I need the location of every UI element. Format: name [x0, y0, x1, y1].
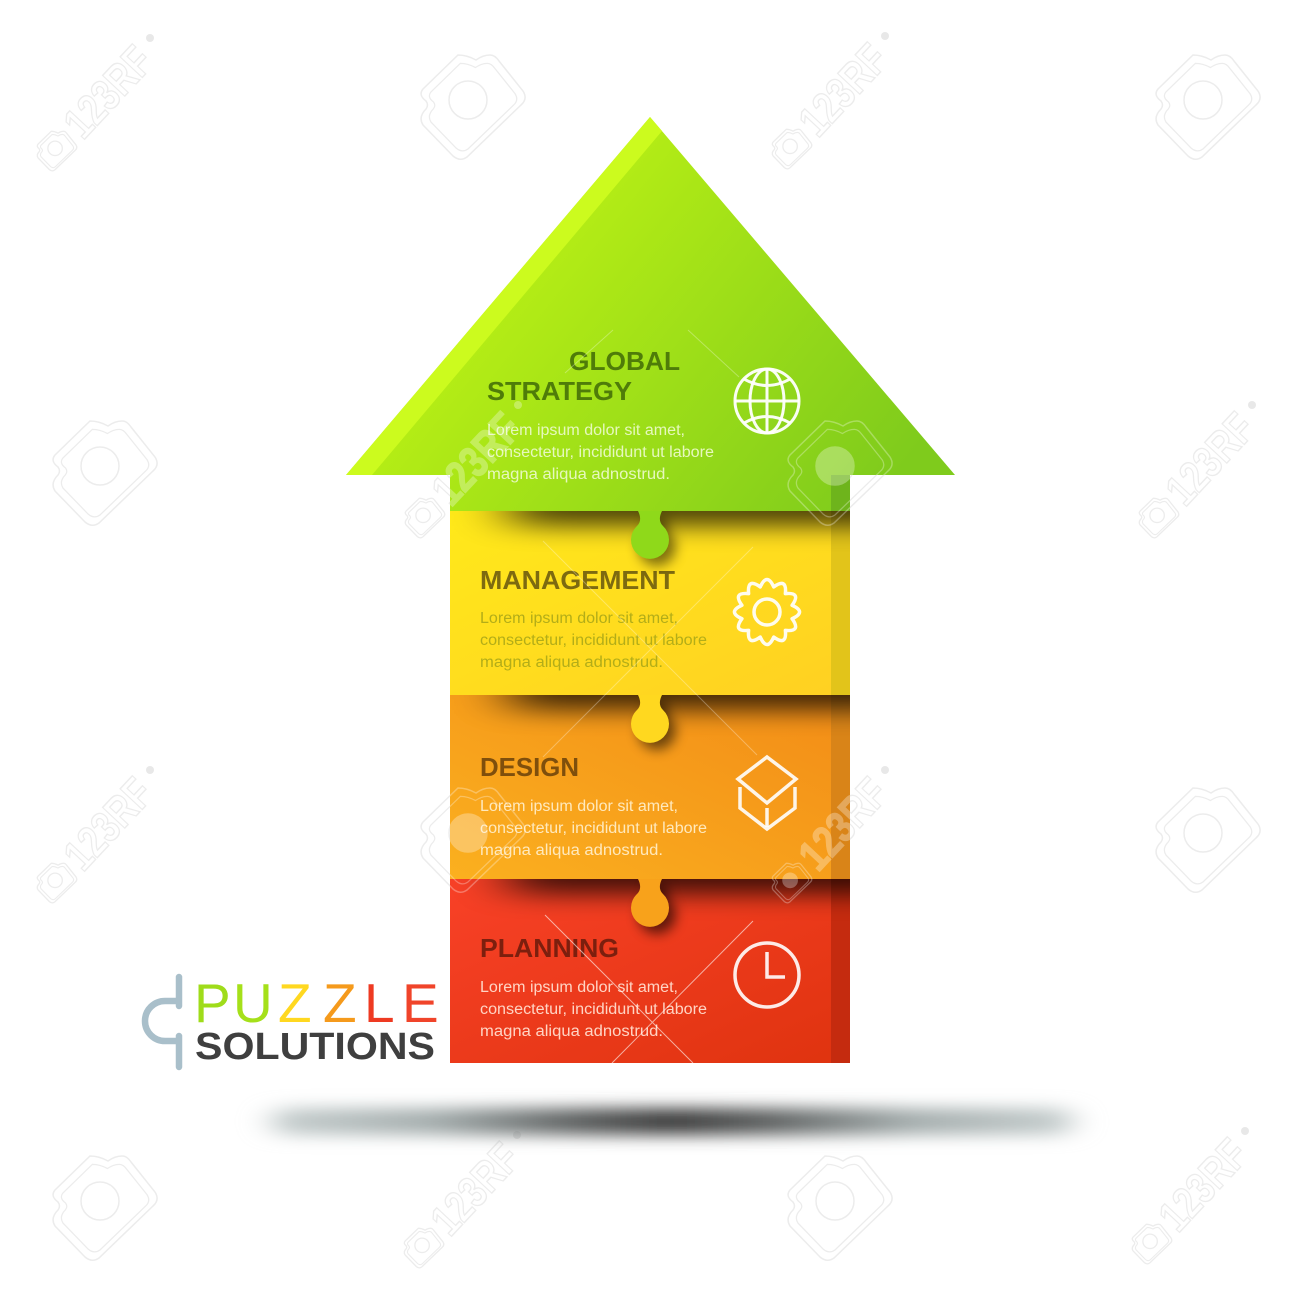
- heading: global strategy: STRATEGY: [487, 376, 632, 406]
- logo word: puzzle: Z: [278, 972, 312, 1034]
- text block: management: Lorem ipsum dolor sit amet,: [480, 610, 678, 627]
- heading: planning: PLANNING: [480, 933, 619, 963]
- logo word: puzzle: E: [402, 972, 439, 1034]
- text block: design: magna aliqua adnostrud.: [480, 842, 663, 859]
- text block: planning: consectetur, incididunt ut labore: [480, 1001, 707, 1018]
- shadow and tab from global strategy onto management: [467, 511, 850, 574]
- panel: design: [450, 695, 850, 942]
- text block: planning: Lorem ipsum dolor sit amet,: [480, 979, 678, 996]
- watermark: diagonal lines: [543, 330, 757, 1063]
- logo word: puzzle: Z: [323, 972, 357, 1034]
- heading: global strategy: GLOBAL: [569, 346, 680, 376]
- icon: puzzle connector: [145, 977, 179, 1067]
- text block: design: consectetur, incididunt ut labore: [480, 820, 707, 837]
- text block: global strategy: magna aliqua adnostrud.: [487, 466, 670, 483]
- logo: puzzle solutions: [145, 972, 439, 1068]
- icon: clock: [735, 943, 799, 1007]
- logo word: puzzle: U: [233, 972, 273, 1034]
- text block: planning: magna aliqua adnostrud.: [480, 1023, 663, 1040]
- text block: global strategy: Lorem ipsum dolor sit amet,: [487, 422, 685, 439]
- icon: cube: [738, 757, 796, 829]
- text block: design: Lorem ipsum dolor sit amet,: [480, 798, 678, 815]
- panel: management: [450, 511, 850, 758]
- panel: global strategy: [346, 117, 955, 566]
- text block: management: consectetur, incididunt ut labore: [480, 632, 707, 649]
- arrow left facet: [346, 117, 662, 475]
- arrow head and stem: [346, 117, 955, 511]
- icon: globe: [735, 369, 799, 433]
- shadow and tab from management onto design: [467, 695, 850, 758]
- logo word: puzzle: L: [364, 972, 395, 1034]
- icon: gear: [734, 579, 800, 645]
- heading: management: MANAGEMENT: [480, 565, 675, 595]
- arrow right stem shade: [831, 475, 850, 511]
- logo word: puzzle: P: [194, 972, 231, 1034]
- heading: design: DESIGN: [480, 752, 579, 782]
- floor shadow: [272, 1108, 1072, 1135]
- text block: management: magna aliqua adnostrud.: [480, 654, 663, 671]
- text block: global strategy: consectetur, incididunt ut labore: [487, 444, 714, 461]
- shadow and tab from design onto planning: [467, 879, 850, 942]
- watermark: stock marks on panels: [405, 401, 898, 903]
- logo word: solutions: SOLUTIONS: [195, 1026, 435, 1068]
- panel: planning: [450, 879, 850, 1063]
